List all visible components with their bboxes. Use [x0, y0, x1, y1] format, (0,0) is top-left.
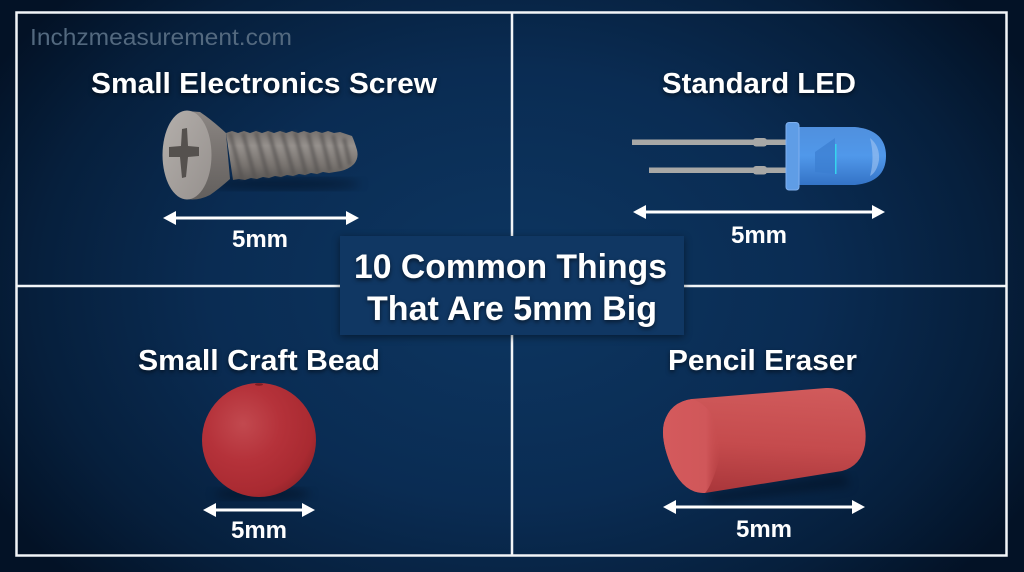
- label: 5mm: 5mm: [736, 516, 792, 543]
- heading: screw: Small Electronics Screw: [91, 68, 437, 100]
- dimension arrow: LED: [633, 205, 885, 219]
- label: 5mm: 5mm: [232, 226, 288, 253]
- icon: bead: [202, 383, 316, 500]
- heading: bead: Small Craft Bead: [138, 345, 380, 377]
- label: 5mm: 5mm: [731, 222, 787, 249]
- icon: screw: [162, 110, 360, 200]
- icon: eraser: [663, 388, 866, 503]
- heading: LED: Standard LED: [662, 68, 856, 100]
- title line 1: 10 Common Things: [354, 248, 667, 286]
- panel: standard LED: [632, 68, 886, 249]
- title box: [340, 236, 684, 335]
- heading: eraser: Pencil Eraser: [668, 345, 857, 377]
- panel: pencil eraser: [663, 345, 866, 543]
- label: 5mm: 5mm: [231, 517, 287, 544]
- title line 2: That Are 5mm Big: [367, 290, 657, 328]
- icon: LED: [632, 122, 886, 190]
- panel: small craft bead: [138, 345, 380, 544]
- dimension arrow: screw: [163, 211, 359, 225]
- dimension arrow: eraser: [663, 500, 865, 514]
- dimension arrow: bead: [203, 503, 315, 517]
- watermark: Inchzmeasurement.com: [30, 24, 292, 50]
- panel: small electronics screw: [91, 68, 437, 253]
